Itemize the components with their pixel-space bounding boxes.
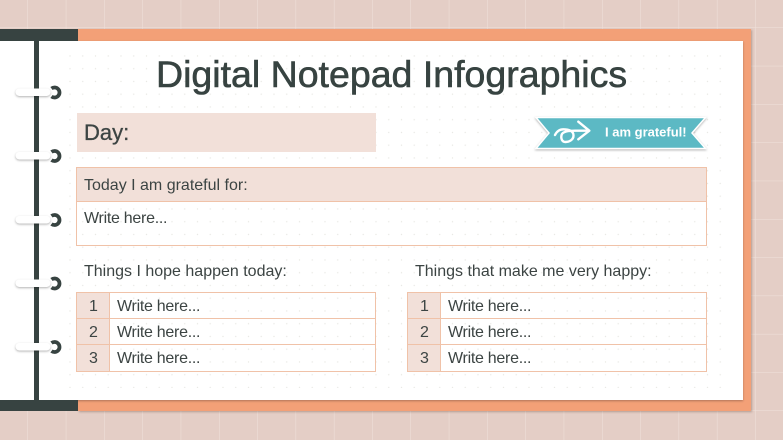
heading: things that make me very happy: Things that make me very happy:	[415, 263, 652, 280]
notebook back cover	[78, 29, 751, 411]
table: things that make me very happy: Write here...	[448, 324, 531, 341]
icon: looped arrow	[555, 122, 589, 142]
notebook page	[0, 41, 743, 400]
title: Digital Notepad Infographics	[156, 53, 627, 95]
row 1: 1	[420, 298, 429, 315]
panel placeholder text: Write here...	[84, 210, 167, 227]
row 3: 3	[420, 350, 429, 367]
binder bottom bar	[0, 400, 78, 411]
table: things I hope happen today	[76, 292, 376, 372]
row 2: 2	[89, 324, 98, 341]
ribbon badge: I am grateful	[534, 118, 708, 152]
panel heading	[77, 168, 706, 202]
table: things I hope happen today: Write here...	[117, 350, 200, 367]
heading: things I hope happen today: Things I hope happen today:	[84, 263, 287, 280]
table: things that make me very happy: Write here...	[448, 298, 531, 315]
row 1: 1	[89, 298, 98, 315]
binder top bar	[0, 29, 78, 41]
table: things that make me very happy	[407, 292, 707, 372]
day field	[77, 113, 376, 152]
row 3: 3	[89, 350, 98, 367]
row 2: 2	[420, 324, 429, 341]
ribbon text: I am grateful!	[605, 124, 687, 140]
panel: today I am grateful for	[76, 167, 707, 246]
table: things I hope happen today: Write here...	[117, 324, 200, 341]
binder spine	[34, 41, 39, 400]
table: things that make me very happy: Write here...	[448, 350, 531, 367]
table: things I hope happen today: Write here...	[117, 298, 200, 315]
day label: Day:	[84, 120, 129, 145]
panel heading: Today I am grateful for:	[84, 177, 248, 194]
binder rings	[14, 86, 62, 354]
